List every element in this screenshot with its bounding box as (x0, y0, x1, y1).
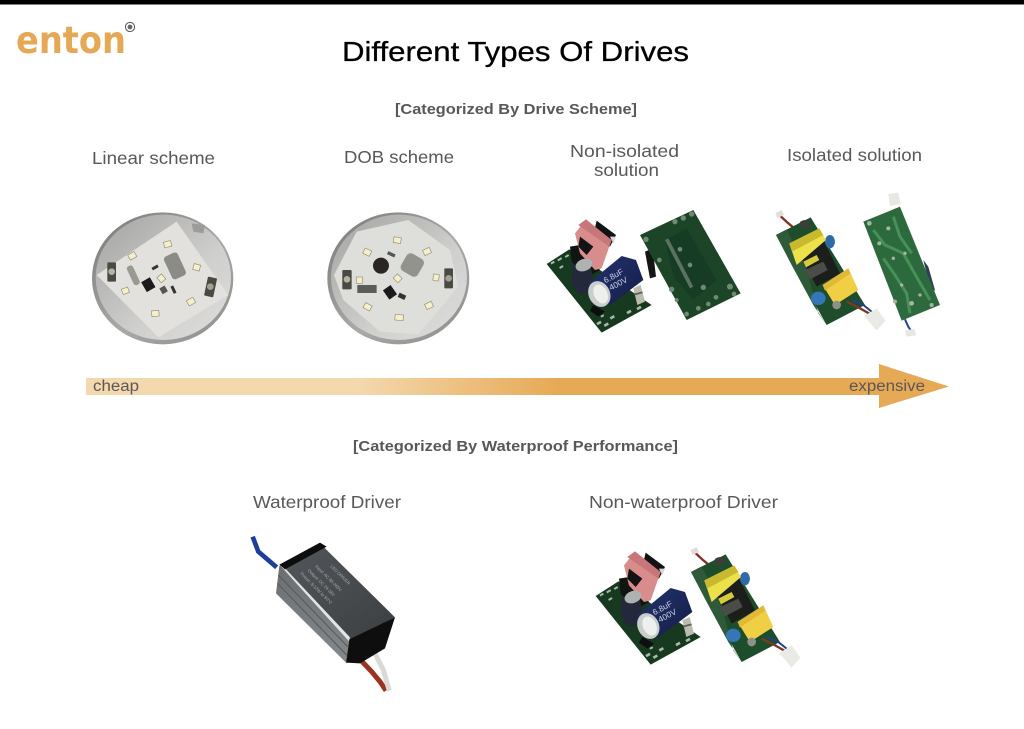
image: non-isolated board front (547, 219, 652, 333)
label: isolated solution: Isolated solution (787, 145, 922, 165)
logo: enton: enton (16, 19, 126, 62)
section heading: drive scheme: [Categorized By Drive Scheme] (395, 101, 637, 118)
label: non-waterproof driver: Non-waterproof Driver (589, 492, 778, 512)
label: waterproof driver: Waterproof Driver (253, 492, 401, 512)
image: isolated board (690, 547, 800, 668)
image: DOB scheme module (327, 212, 469, 344)
label: non-isolated solution (570, 141, 679, 180)
section heading: waterproof performance: [Categorized By Waterproof Performance] (353, 438, 678, 455)
panel: DOB scheme (327, 147, 469, 344)
image: waterproof driver: LED DRIVER (329, 564, 351, 586)
image: linear scheme module (92, 212, 233, 344)
top black bar (0, 0, 1024, 4)
label: non-isolated solution: solution (594, 160, 659, 180)
image: waterproof driver (253, 537, 395, 691)
label: DOB scheme: DOB scheme (344, 147, 454, 167)
title: Different Types Of Drives (342, 36, 689, 67)
panel: isolated solution (775, 145, 940, 337)
icon: registered mark (125, 22, 135, 32)
panel: waterproof driver (253, 492, 401, 691)
image: isolated board back (863, 193, 940, 337)
label: non-isolated solution: Non-isolated (570, 141, 679, 161)
arrow label: expensive: expensive (849, 378, 925, 395)
label: linear scheme: Linear scheme (92, 148, 215, 168)
image: waterproof driver: Input: AC 85-265V (314, 564, 343, 592)
image: isolated board front (775, 210, 885, 331)
panel: non-isolated solution (547, 141, 741, 333)
image: non-isolated board (596, 551, 701, 665)
image: non-isolated board back (640, 210, 741, 320)
panel: linear scheme (92, 148, 233, 344)
panel: non-waterproof driver (589, 492, 800, 668)
arrow label: cheap: cheap (93, 378, 139, 395)
arrow: cheap to expensive (86, 364, 949, 408)
image: waterproof driver: Output: DC 24-36V (307, 568, 336, 597)
image: waterproof driver: Power: 8-12W ta 50°C (299, 571, 333, 605)
